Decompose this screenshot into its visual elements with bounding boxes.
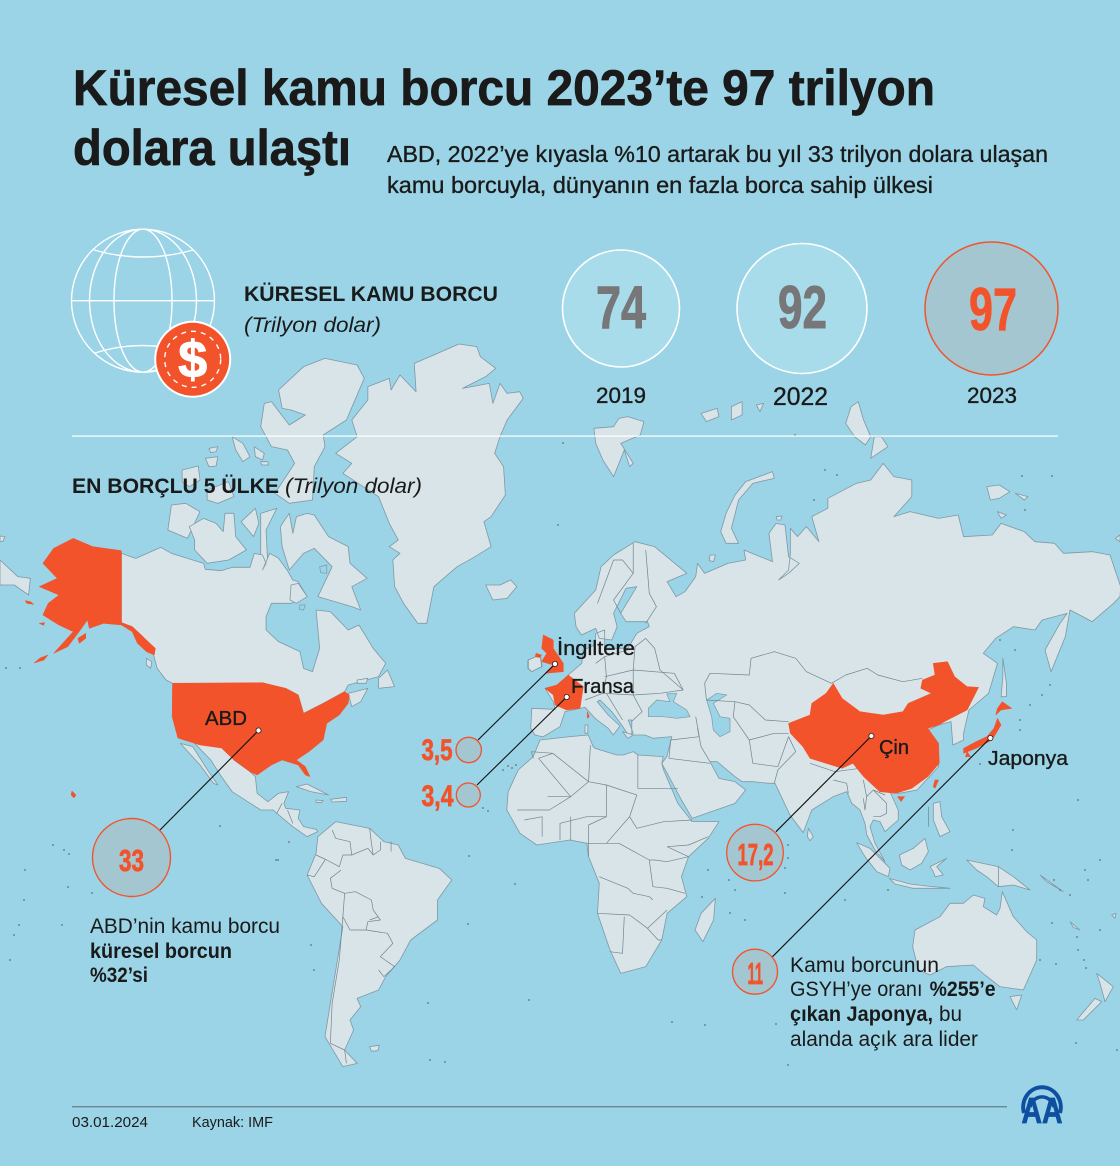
world map bbox=[0, 344, 1120, 1067]
icon: globe with dollar coin bbox=[72, 229, 231, 398]
map: oceania bbox=[913, 860, 1116, 1020]
map: china highlighted bbox=[789, 662, 979, 802]
stat: 2019: 2019 bbox=[596, 383, 646, 408]
callout: usa: 33 bbox=[119, 843, 144, 878]
callout: united kingdom: 3,5 bbox=[422, 734, 452, 767]
map: japan highlighted bbox=[964, 702, 1012, 757]
map: ireland bbox=[528, 655, 542, 672]
stat: 2022: 2022 bbox=[773, 383, 828, 411]
title: dolara ulaştı bbox=[73, 120, 351, 176]
map: borders of africa bbox=[517, 745, 708, 953]
callout: china bbox=[727, 733, 909, 881]
footer bbox=[72, 1106, 1007, 1131]
callout: japan: %255’e bbox=[930, 978, 996, 1001]
map: north america and arctic bbox=[0, 344, 523, 713]
stat: 2023: 97 bbox=[969, 276, 1017, 343]
map: usa highlighted in orange bbox=[25, 538, 349, 798]
callout: china: 17,2 bbox=[738, 837, 774, 872]
heading: global public debt: (Trilyon dolar) bbox=[244, 314, 381, 337]
heading: global public debt bbox=[244, 283, 498, 337]
heading: global public debt: KÜRESEL KAMU BORCU bbox=[244, 283, 498, 306]
map: united kingdom highlighted bbox=[535, 635, 563, 673]
callout: japan: Kamu borcunun bbox=[790, 954, 939, 977]
callout: japan: bu bbox=[939, 1003, 962, 1026]
heading: top five most indebted countries: (Trilyon dolar) bbox=[285, 475, 422, 498]
callout: usa: ABD’nin kamu borcu bbox=[90, 915, 280, 938]
subtitle: kamu borcuyla, dünyanın en fazla borca sahip ülkesi bbox=[387, 172, 933, 198]
map: latin america borders bbox=[277, 803, 395, 1063]
stat: 2019: 74 bbox=[596, 274, 646, 341]
map: eurasia and africa bbox=[507, 402, 1120, 973]
callout: france bbox=[422, 676, 635, 813]
heading: top five most indebted countries bbox=[72, 475, 422, 498]
footer: Kaynak: IMF bbox=[192, 1115, 273, 1131]
map: south-east asian islands bbox=[807, 802, 950, 888]
callout: china: Çin bbox=[879, 737, 909, 759]
callout: japan: çıkan Japonya, bbox=[790, 1003, 933, 1026]
icon: agency logo: AA bbox=[1022, 1090, 1062, 1131]
heading: top five most indebted countries: EN BORÇLU 5 ÜLKE bbox=[72, 475, 279, 498]
callout: japan bbox=[732, 735, 1069, 1051]
callout: japan: Japonya bbox=[988, 748, 1069, 770]
icon: globe with dollar coin: $ bbox=[178, 331, 207, 389]
map: borders of asia and europe bbox=[585, 543, 922, 783]
callout: usa: ABD bbox=[205, 708, 247, 730]
title bbox=[73, 60, 935, 176]
title: Küresel kamu borcu 2023’te 97 trilyon bbox=[73, 60, 935, 116]
callout: usa: küresel borcun bbox=[90, 940, 232, 963]
map: hudson islands bbox=[299, 565, 327, 610]
stat: 2019 bbox=[562, 250, 680, 408]
stat: 2023 bbox=[925, 242, 1058, 408]
callout: usa: %32’si bbox=[90, 964, 148, 987]
subtitle: ABD, 2022’ye kıyasla %10 artarak bu yıl 33 trilyon dolara ulaşan bbox=[387, 141, 1048, 167]
callout: france: Fransa bbox=[571, 676, 635, 698]
callout: japan: GSYH’ye oranı bbox=[790, 978, 922, 1001]
map: new guinea border bbox=[997, 867, 999, 887]
subtitle bbox=[387, 141, 1048, 198]
divider line bbox=[72, 435, 1058, 437]
map: latin america bbox=[180, 743, 452, 1067]
stat: 2022 bbox=[737, 244, 867, 411]
callout: usa bbox=[90, 708, 280, 987]
callout: france: 3,4 bbox=[422, 780, 454, 813]
map: borders of south-east asia bbox=[810, 763, 929, 827]
footer: 03.01.2024 bbox=[72, 1115, 148, 1131]
callout: united kingdom: İngiltere bbox=[557, 637, 635, 660]
map: small islands scattered across the oceans bbox=[5, 434, 1118, 1066]
callout: united kingdom bbox=[422, 637, 635, 767]
map: inland seas bbox=[648, 693, 730, 737]
stat: 2022: 92 bbox=[778, 274, 827, 341]
map: france highlighted bbox=[545, 675, 589, 718]
callout: japan: alanda açık ara lider bbox=[790, 1028, 978, 1051]
callout: japan: 11 bbox=[748, 956, 763, 991]
stat: 2023: 2023 bbox=[967, 383, 1017, 408]
